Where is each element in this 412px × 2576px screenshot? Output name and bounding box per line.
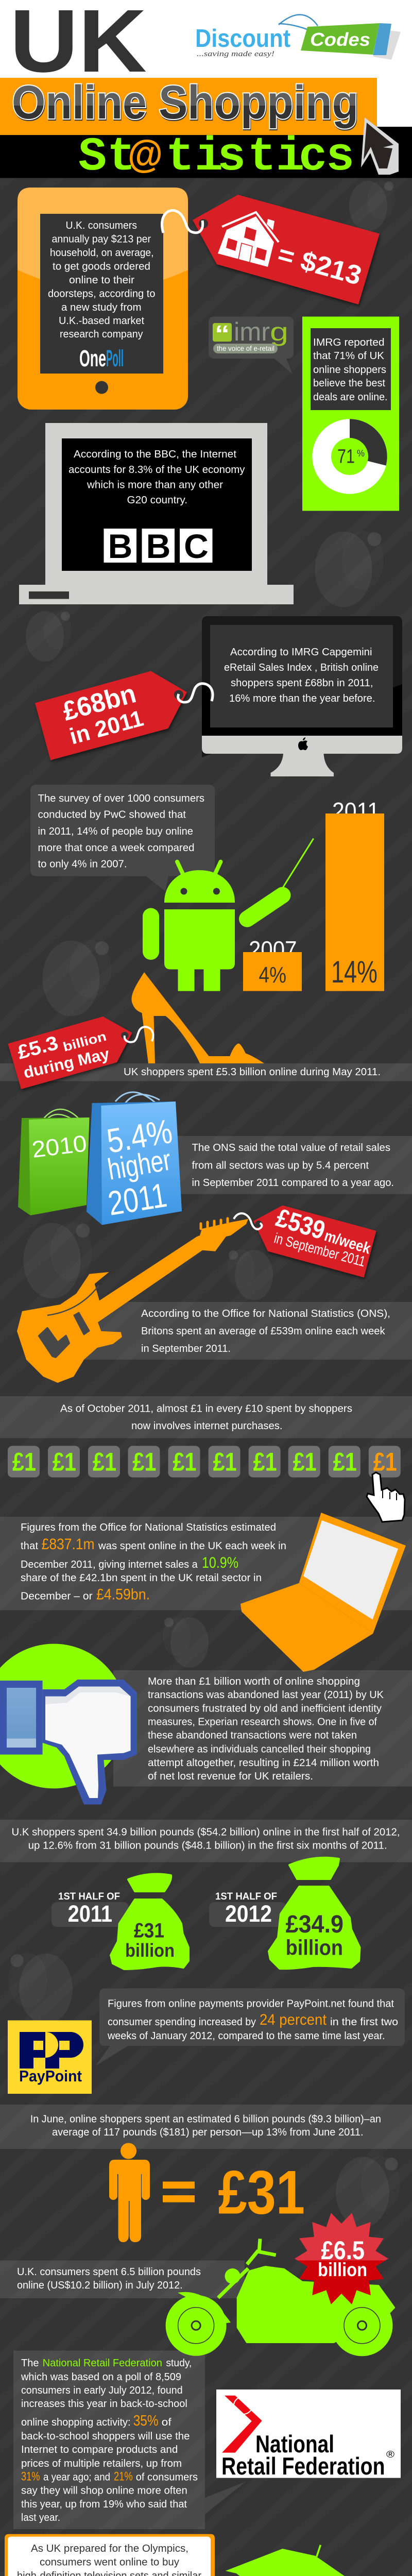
donut chart: 71%: 71 <box>337 446 355 468</box>
text: abandoned transactions: attempt altogether, resulting in £214 million worth <box>148 1757 379 1769</box>
price tag: £5.3 billion during May: billion <box>61 1029 108 1055</box>
text: BBC internet economy: accounts for 8.3% of the UK economy <box>68 464 245 476</box>
text: best deals online: online shoppers <box>313 364 386 376</box>
icon: blue shopping bag 5.4% higher 2011 <box>87 1092 182 1225</box>
band: ONS December figures: December 2011, giving internet sales a <box>21 1559 198 1570</box>
icon: blue shopping bag 5.4% higher 2011: higher <box>105 1143 173 1187</box>
text: abandoned transactions: measures, Experian research shows. One in five of <box>148 1717 377 1728</box>
starburst: £6.5 billion: billion <box>318 2259 367 2280</box>
logo: BBC: B <box>108 527 132 565</box>
pictogram: ten £1 tiles: £1 <box>133 1448 157 1477</box>
starburst: £6.5 billion <box>295 2213 388 2304</box>
logo: National Retail Federation: Retail Federation <box>221 2452 385 2480</box>
band: £1 in every £10: As of October 2011, almost £1 in every £10 spent by shoppers <box>60 1403 352 1415</box>
panel: National Retail Federation study: of <box>162 2417 171 2428</box>
heading: Statistics: St <box>78 130 135 184</box>
panel: National Retail Federation study: last year. <box>21 2512 60 2523</box>
price tag: £68bn in 2011: £68bn <box>60 679 139 727</box>
money bag: first half 2012: £34.9 <box>286 1911 344 1938</box>
pictogram: person = £31: £31 <box>218 2158 305 2227</box>
logo: Discount Codes <box>195 14 401 60</box>
panel: National Retail Federation study: 35% <box>133 2413 159 2429</box>
band: ONS December figures: £837.1m <box>42 1536 95 1553</box>
panel: National Retail Federation study: online shopping activity: <box>21 2417 131 2428</box>
band: first half 2012: U.K shoppers spent 34.9 billion pounds ($54.2 billion) online in the first half of 2012, <box>11 1827 400 1838</box>
band: first half 2012 <box>0 1820 412 1862</box>
text: BBC internet economy: which is more than any other <box>87 479 223 490</box>
money bag: first half 2011: 1ST HALF OF <box>58 1891 120 1902</box>
pictogram: ten £1 tiles: £1 <box>253 1448 277 1477</box>
panel: National Retail Federation study: a year ago; and <box>43 2472 110 2483</box>
icon: monitor with Olympics text <box>5 2534 215 2576</box>
text: household delivery cost: U.K. consumers <box>66 220 137 231</box>
panel: tablet household cost: Poll <box>106 345 124 371</box>
panel: National Retail Federation study: National Retail Federation <box>43 2358 162 2369</box>
logo: BBC: B <box>146 527 170 565</box>
text: = $213: = $213 <box>274 240 365 291</box>
band: ONS December figures <box>0 1517 412 1611</box>
logo: National Retail Federation <box>216 2389 401 2480</box>
price tag: £5.3 billion during May: during May <box>22 1044 111 1082</box>
pictogram: ten £1 tiles: £1 <box>213 1448 237 1477</box>
band: ONS retail sales <box>175 1136 412 1194</box>
pictogram: ten £1 tiles <box>8 1446 401 1478</box>
heading: Online Shopping: Online Shopping <box>12 76 358 129</box>
price tag: £539m/week: £539 <box>273 1203 329 1245</box>
logo: Discount Codes: ...saving made easy! <box>197 50 274 58</box>
bar chart: 2007 vs 2011: 4% <box>259 962 286 988</box>
icon: blue shopping bag 5.4% higher 2011: 5.4% <box>104 1112 175 1160</box>
band: ONS December figures: share of the £42.1bn spent in the UK retail sector in <box>21 1572 262 1584</box>
logo: IMRG speech bubble: “ <box>215 320 230 347</box>
text: £68bn in 2011: According to IMRG Capgemini <box>230 647 372 658</box>
logo: Discount Codes: Codes <box>310 29 370 50</box>
band: ONS retail sales: in September 2011 compared to a year ago. <box>192 1177 394 1189</box>
price tag: £5.3 billion during May: £5.3 <box>15 1032 61 1064</box>
icon: mouse cursor <box>361 117 399 175</box>
band: £5.3 billion in May <box>0 1063 412 1081</box>
text: household delivery cost: research company <box>60 329 143 340</box>
starburst: £6.5 billion: £6.5 <box>321 2236 365 2265</box>
text: best deals online: that 71% of UK <box>313 350 385 362</box>
text: best deals online: IMRG reported <box>313 337 384 348</box>
icon: android with pointer <box>143 839 314 991</box>
text: best deals online: deals are online. <box>313 392 387 403</box>
heading: Statistics: tistics <box>166 130 354 184</box>
price tag: £68bn in 2011 <box>35 671 213 760</box>
orange band <box>0 78 377 135</box>
icon: thumbs down <box>0 1680 137 1804</box>
bar chart: 2007 vs 2011: 2011 <box>332 798 380 824</box>
band: first half 2012: up 12.6% from 31 billion pounds ($48.1 billion) in the first six months of 2011. <box>28 1840 387 1852</box>
logo: Discount Codes: Discount <box>195 25 290 53</box>
callout: PayPoint 24 percent: Figures from online payments provider PayPoint.net found that <box>108 1998 394 2009</box>
callout: PayPoint 24 percent: 24 percent <box>260 2011 327 2028</box>
pictogram: ten £1 tiles: £1 <box>12 1448 36 1477</box>
band: ONS December figures: December – or <box>21 1591 93 1602</box>
text: £68bn in 2011: 16% more than the year before. <box>229 693 375 704</box>
text: abandoned transactions: More than £1 billion worth of online shopping <box>148 1676 360 1687</box>
text: BBC internet economy <box>68 449 245 506</box>
panel: National Retail Federation study: study, <box>166 2358 192 2369</box>
callout: PwC survey <box>30 785 215 891</box>
band: June spending: average of 117 pounds ($181) per person—up 13% from June 2011. <box>52 2127 364 2138</box>
pictogram: ten £1 tiles: £1 <box>93 1448 116 1477</box>
logo: OnePoll: One <box>79 345 106 371</box>
bar chart: 2007 vs 2011: 2007 <box>249 936 297 963</box>
band: £1 in every £10: now involves internet purchases. <box>131 1420 282 1432</box>
logo: IMRG speech bubble: imr <box>234 317 270 346</box>
band: abandoned transactions <box>0 1644 412 1804</box>
money bag: first half 2012: billion <box>286 1935 343 1959</box>
panel: National Retail Federation study: 31% <box>21 2470 40 2483</box>
text: household delivery cost: online to their <box>69 275 134 286</box>
bar chart: 2007 vs 2011: 14% <box>331 955 377 989</box>
band: June spending <box>0 2105 412 2149</box>
band: July 2012 spending: online (US$10.2 billion) in July 2012. <box>17 2280 183 2291</box>
price tag: £68bn in 2011: in 2011 <box>67 706 146 750</box>
band: ONS December figures: that <box>21 1540 38 1552</box>
text: household delivery cost: a new study from <box>61 302 141 313</box>
logo: National Retail Federation: National <box>255 2430 334 2458</box>
band: June spending: In June, online shoppers spent an estimated 6 billion pounds ($9.3 billion)–an <box>30 2114 381 2125</box>
callout: PwC survey: to only 4% in 2007. <box>38 858 127 870</box>
icon: orange laptop <box>241 1513 406 1672</box>
text: best deals online <box>313 337 387 403</box>
band: July 2012 spending: U.K. consumers spent 6.5 billion pounds <box>17 2266 201 2278</box>
icon: green shopping bag 2010 <box>18 1109 90 1215</box>
callout: PwC survey: in 2011, 14% of people buy online <box>38 826 193 837</box>
pictogram: person = £31 <box>109 2143 305 2242</box>
callout: PayPoint 24 percent <box>96 1989 405 2066</box>
text: BBC internet economy: G20 country. <box>127 495 187 506</box>
logo: IMRG speech bubble <box>209 316 294 374</box>
illustration: woman with umbrella <box>136 2545 379 2576</box>
panel: tablet household cost <box>18 188 188 410</box>
panel: National Retail Federation study: increases this year in back-to-school <box>21 2398 187 2410</box>
icon: high heel shoe <box>131 972 264 1063</box>
icon: motorcycle <box>166 2239 394 2356</box>
text: BBC internet economy: According to the BBC, the Internet <box>74 449 236 460</box>
band: ONS weekly spend: Britons spent an average of £539m online each week <box>141 1326 385 1337</box>
panel: National Retail Federation study: of consumers <box>136 2472 198 2483</box>
pictogram: ten £1 tiles: £1 <box>293 1448 317 1477</box>
text: £68bn in 2011 <box>224 647 379 704</box>
band: ONS retail sales: from all sectors was up by 5.4 percent <box>192 1160 369 1171</box>
pictogram: ten £1 tiles: £1 <box>173 1448 197 1477</box>
panel: National Retail Federation study: back-to-school shoppers will use the <box>21 2431 190 2442</box>
band: ONS December figures: was spent online in the UK each week in <box>98 1540 286 1552</box>
band: ONS weekly spend <box>77 1302 412 1360</box>
text: household delivery cost <box>48 220 156 340</box>
icon: apple logo <box>298 737 308 750</box>
price tag: £539m/week <box>234 1203 376 1278</box>
text: household delivery cost: doorsteps, according to <box>48 289 156 300</box>
logo: National Retail Federation: ® <box>386 2449 394 2460</box>
donut chart: 71%: % <box>357 448 365 459</box>
band: ONS December figures: £4.59bn. <box>96 1586 150 1603</box>
text: Olympics electronics: consumers went online to buy <box>40 2556 179 2568</box>
text: £68bn in 2011: eRetail Sales Index , British online <box>224 662 379 673</box>
price tag: £5.3 billion during May <box>8 1016 153 1089</box>
money bag: first half 2012: 2012 <box>225 1901 272 1927</box>
panel: National Retail Federation study: consumers in early July 2012, found <box>21 2385 183 2396</box>
text: abandoned transactions <box>148 1676 384 1782</box>
money bag: first half 2012 <box>209 1858 359 1969</box>
panel: National Retail Federation study <box>13 2350 246 2529</box>
text: best deals online: believe the best <box>313 378 385 389</box>
text: £68bn in 2011: shoppers spent £68bn in 2011, <box>231 677 373 689</box>
money bag: first half 2011: 2011 <box>68 1901 112 1927</box>
text: abandoned transactions: of net lost revenue for UK retailers. <box>148 1771 313 1782</box>
icon: house <box>218 212 279 267</box>
text: abandoned transactions: transactions was abandoned last year (2011) by UK <box>148 1689 384 1701</box>
price tag: house = $213 <box>162 195 380 304</box>
title block <box>0 0 412 184</box>
icon: electric guitar <box>17 1218 248 1383</box>
text: Olympics electronics: As UK prepared for the Olympics, <box>31 2543 188 2554</box>
panel: National Retail Federation study: say they will shop online more often <box>21 2485 187 2497</box>
band: July 2012 spending <box>0 2261 245 2298</box>
pictogram: ten £1 tiles: £1 <box>333 1448 357 1477</box>
logo: BBC: C <box>184 527 209 565</box>
text: abandoned transactions: elsewhere as individuals cancelled their shopping <box>148 1743 371 1755</box>
text: household delivery cost: to get goods ordered <box>53 261 150 272</box>
callout: PwC survey: The survey of over 1000 consumers <box>38 793 204 804</box>
panel: laptop BBC <box>19 423 294 604</box>
logo: BBC <box>104 527 212 565</box>
band: £1 in every £10 <box>0 1396 412 1438</box>
callout: PayPoint 24 percent: consumer spending increased by <box>108 2016 256 2028</box>
logo: PayPoint <box>8 2021 92 2094</box>
panel: National Retail Federation study: The <box>21 2358 39 2369</box>
panel: IMRG 71% <box>302 316 399 511</box>
donut chart: 71% <box>312 419 387 494</box>
bar chart: 2007 vs 2011 <box>243 798 384 991</box>
price tag: £539m/week: m/week <box>322 1227 373 1258</box>
panel: iMac IMRG Capgemini <box>202 616 402 776</box>
panel: National Retail Federation study: 21% <box>114 2470 133 2483</box>
band: ONS December figures: 10.9% <box>202 1554 238 1571</box>
text: household delivery cost: annually pay $213 per <box>52 234 151 245</box>
money bag: first half 2011: billion <box>125 1940 175 1961</box>
panel: National Retail Federation study: prices of multiple retailers, up from <box>21 2458 182 2469</box>
text: Olympics electronics <box>17 2543 201 2576</box>
text: abandoned transactions: these abandoned transactions were not taken <box>148 1730 357 1741</box>
band: ONS December figures: Figures from the Office for National Statistics estimated <box>21 1522 276 1533</box>
band: ONS retail sales: The ONS said the total value of retail sales <box>192 1142 390 1154</box>
money bag: first half 2012: 1ST HALF OF <box>215 1891 277 1902</box>
callout: PayPoint 24 percent: weeks of January 2012, compared to the same time last year. <box>107 2030 385 2042</box>
price tag: £539m/week: in September 2011 <box>272 1230 367 1269</box>
logo: IMRG speech bubble: g <box>270 317 288 346</box>
text: household delivery cost: U.K.-based market <box>59 315 144 327</box>
pictogram: ten £1 tiles: £1 <box>373 1448 397 1477</box>
text: abandoned transactions: consumers frustrated by old and inefficient identity <box>148 1703 382 1715</box>
money bag: first half 2011 <box>52 1874 188 1969</box>
band: £5.3 billion in May: UK shoppers spent £5.3 billion online during May 2011. <box>124 1066 381 1078</box>
text: household delivery cost: household, on average, <box>50 247 153 259</box>
panel: National Retail Federation study: this year, up from 19% who said that <box>21 2499 187 2510</box>
panel: National Retail Federation study: which was based on a poll of 8,509 <box>21 2371 181 2383</box>
callout: PwC survey: conducted by PwC showed that <box>38 809 186 821</box>
callout: PayPoint 24 percent: in the first two <box>330 2016 398 2028</box>
panel: National Retail Federation study: Internet to compare products and <box>21 2444 178 2455</box>
icon: green shopping bag 2010: 2010 <box>30 1130 88 1163</box>
band: ONS weekly spend: According to the Office for National Statistics (ONS), <box>141 1308 390 1319</box>
icon: hand cursor <box>367 1472 405 1522</box>
pictogram: ten £1 tiles: £1 <box>53 1448 76 1477</box>
heading: Statistics <box>78 130 354 184</box>
callout: PwC survey: more that once a week compared <box>38 842 195 854</box>
panel: rain and clothing sales <box>136 2545 409 2576</box>
heading: Statistics: @ <box>128 132 163 175</box>
money bag: first half 2011: £31 <box>134 1920 164 1942</box>
black band <box>0 127 412 178</box>
tablet body <box>18 188 188 410</box>
logo: PayPoint: PayPoint <box>19 2067 82 2085</box>
band: ONS weekly spend: in September 2011. <box>141 1343 231 1354</box>
icon: blue shopping bag 5.4% higher 2011: 2011 <box>106 1176 169 1223</box>
logo: IMRG speech bubble: the voice of e-retail <box>217 344 274 352</box>
